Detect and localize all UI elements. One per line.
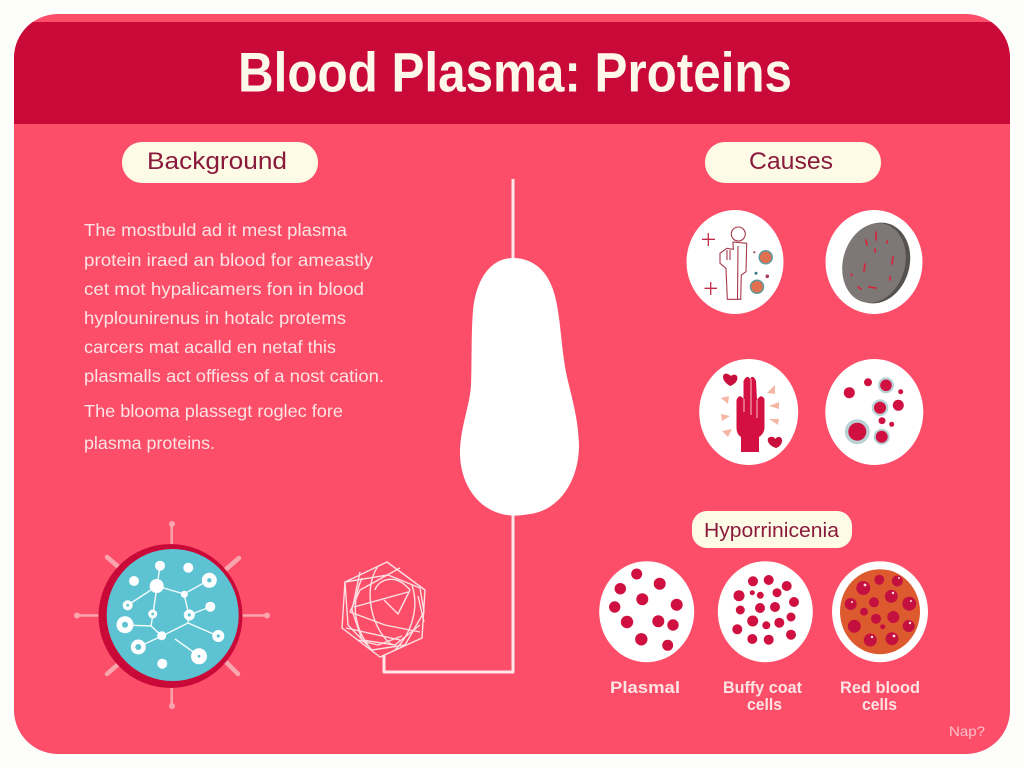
text block: background description: The mostbuld ad it mest plasma	[84, 220, 347, 240]
text block: background description: plasma proteins.	[84, 433, 215, 453]
label: Buffy coat cells	[723, 679, 802, 714]
heading: Hyporrinicenia	[692, 511, 852, 548]
heading: Background	[122, 142, 318, 183]
label: Red blood cells: Red blood	[840, 679, 920, 697]
heading: Hyporrinicenia: Hyporrinicenia	[704, 520, 840, 542]
heading: Background: Background	[147, 148, 287, 175]
label: Red blood cells	[840, 679, 920, 714]
text block: background description	[84, 220, 384, 453]
text block: background description: cet mot hypalicamers fon in blood	[84, 279, 364, 299]
icon: grey disc	[826, 210, 922, 314]
icon: buffy coat circle	[718, 561, 813, 662]
icon: molecule in cell	[74, 521, 270, 709]
text block: background description: carcers mat acalld en netaf this	[84, 337, 336, 357]
icon: red blood cells circle	[832, 561, 928, 662]
header band	[14, 22, 1010, 124]
label: Buffy coat cells: cells	[747, 696, 782, 714]
text block: background description: plasmalls act offiess of a nost cation.	[84, 366, 384, 386]
label: Plasmal: Plasmal	[610, 678, 680, 697]
icon: wireframe protein	[342, 562, 425, 657]
label: Buffy coat cells: Buffy coat	[723, 679, 802, 697]
text block: background description: The blooma plassegt roglec fore	[84, 401, 343, 421]
connector line	[384, 179, 513, 672]
heading: Causes	[705, 142, 881, 183]
icon: scattered cells	[825, 359, 923, 465]
icon: hand with hearts	[699, 359, 798, 465]
label: Red blood cells: cells	[862, 696, 897, 714]
footer note: Nap?	[949, 723, 985, 739]
title: Blood Plasma: Proteins	[238, 40, 792, 104]
heading: Causes: Causes	[749, 148, 833, 175]
icon: person with cells	[686, 210, 784, 314]
text block: background description: protein iraed an blood for ameastly	[84, 250, 373, 270]
icon: plasmal circle	[599, 561, 694, 662]
central plasma blob	[460, 258, 579, 516]
text block: background description: hyplounirenus in hotalc protems	[84, 308, 346, 328]
